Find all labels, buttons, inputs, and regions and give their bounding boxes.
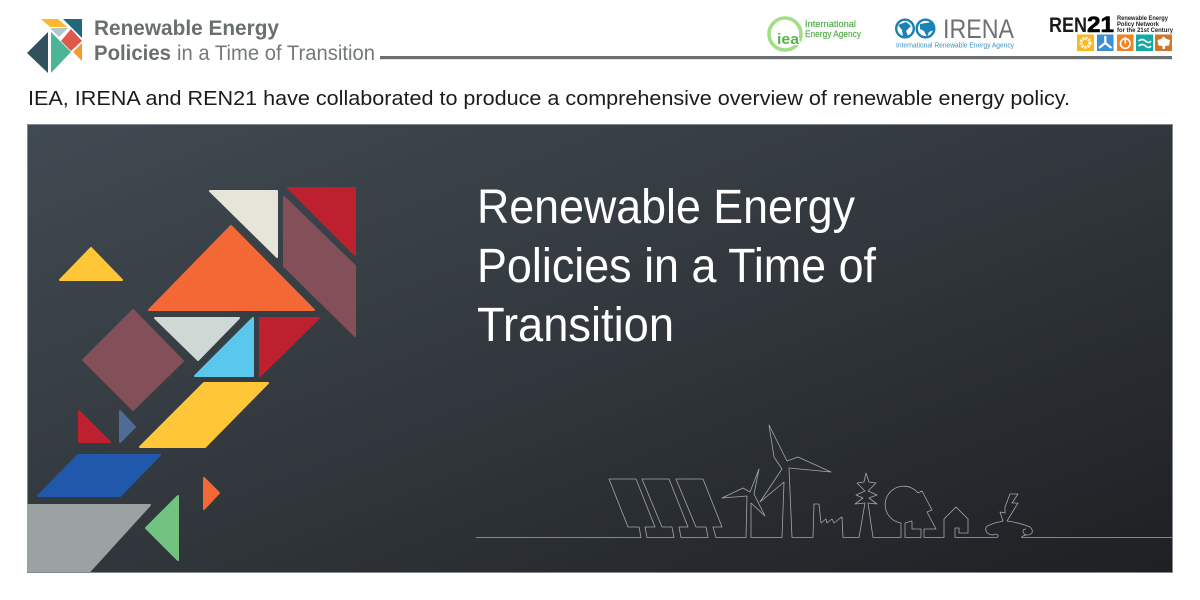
intro sentence: IEA, IRENA and REN21 have collaborated to produce a comprehensive overview of renewable energy policy. (28, 88, 1070, 110)
logo: REN21: Renewable Energy (1117, 15, 1169, 22)
logo: IEA: iea (777, 31, 800, 48)
header title: Renewable Energy (94, 17, 279, 40)
cover title: Renewable Energy (477, 181, 855, 234)
logo: REN21: Policy Network (1117, 21, 1160, 28)
cover title: Transition (477, 299, 674, 352)
header rule (380, 56, 1172, 59)
panel: dark cover banner (28, 124, 1172, 572)
logo: IEA: International (805, 19, 856, 30)
header title: Policies (94, 42, 171, 65)
logo: REN21 (1049, 12, 1174, 51)
header title: in a Time of Transition (177, 42, 375, 65)
logo: IEA (769, 18, 861, 50)
header logo mark (27, 19, 82, 73)
logo: IEA: Energy Agency (805, 29, 861, 40)
line illustration: renewable landscape (476, 425, 1172, 538)
header title (94, 17, 375, 65)
logo: IRENA: IRENA (943, 14, 1014, 44)
cover title: Policies in a Time of (477, 240, 877, 293)
logo: REN21: for the 21st Century (1117, 27, 1174, 34)
logo: REN21: 21 (1087, 12, 1114, 37)
logo: IRENA (896, 14, 1014, 50)
tangram artwork (28, 188, 355, 571)
logo: IRENA: International Renewable Energy Agency (896, 42, 1014, 50)
logo: REN21: REN (1049, 14, 1087, 37)
cover title (477, 181, 877, 352)
